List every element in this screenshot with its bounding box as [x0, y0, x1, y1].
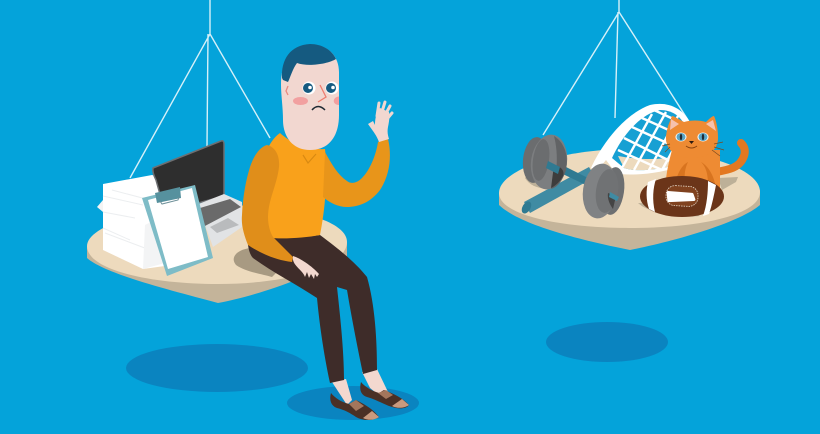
ear — [286, 86, 288, 95]
right platform — [499, 149, 760, 250]
tennis racket — [591, 104, 690, 175]
hand: waving — [368, 102, 392, 142]
laptop — [153, 141, 242, 247]
sweater body — [260, 133, 326, 238]
eyes — [302, 82, 338, 94]
strings: right scale — [543, 0, 688, 135]
near shoe — [330, 393, 379, 420]
object shadows on right platform — [525, 165, 738, 216]
dumbbell — [520, 132, 627, 221]
man — [242, 44, 409, 420]
stack of papers — [97, 175, 194, 269]
hair — [282, 44, 336, 82]
strings: left scale — [130, 0, 270, 178]
hand: resting — [293, 256, 319, 279]
cat — [662, 116, 745, 192]
body — [666, 150, 720, 192]
right arm — [323, 139, 390, 207]
clipboard — [142, 185, 213, 276]
left arm — [242, 145, 293, 262]
far shoe — [360, 382, 409, 408]
head — [666, 116, 718, 158]
right weights — [599, 166, 627, 216]
shadow: left platform — [126, 344, 308, 392]
handle over weight — [546, 161, 560, 174]
neck V detail — [303, 154, 316, 163]
trousers — [248, 235, 377, 383]
left platform — [87, 205, 347, 303]
handle — [546, 158, 592, 187]
shadow: feet — [287, 386, 419, 420]
tail — [716, 143, 745, 172]
shadow: right platform — [546, 322, 668, 362]
lower bar — [524, 167, 595, 213]
near leg skin — [332, 379, 352, 405]
left weights — [521, 136, 549, 184]
mouth — [312, 106, 325, 110]
seat shadow on platform — [234, 248, 287, 277]
neck and head — [281, 45, 339, 150]
cheeks — [293, 96, 339, 105]
far leg skin — [362, 369, 388, 396]
american football — [640, 176, 724, 217]
nose — [318, 85, 326, 102]
